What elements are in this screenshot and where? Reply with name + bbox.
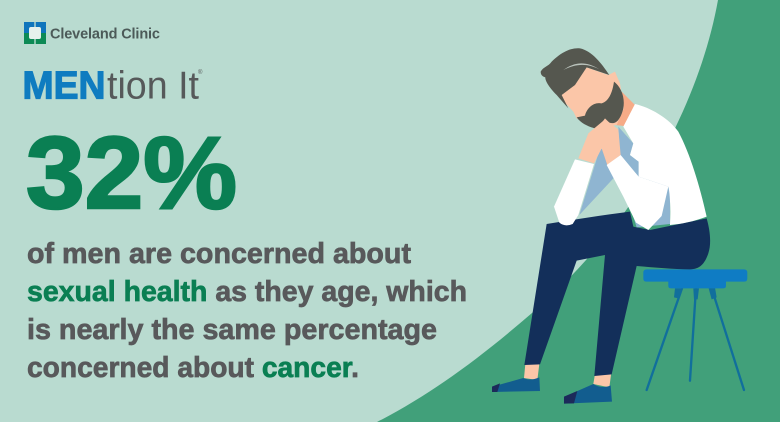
MENtion It program name: tion It: [107, 64, 199, 108]
stool: [643, 269, 747, 390]
face: [559, 67, 624, 128]
rear arm sleeve: [554, 159, 594, 225]
MENtion It program name: ®: [198, 69, 203, 76]
headline statistic: 32%: [26, 116, 237, 230]
beard: [577, 82, 624, 129]
body text: of men are concerned about: [27, 238, 411, 270]
MENtion It program name: [22, 64, 203, 108]
illustration: seated man: [492, 48, 747, 404]
front arm sleeve: [607, 155, 668, 230]
neck: [615, 92, 635, 126]
body text: [27, 238, 467, 384]
logo wordmark: Cleveland Clinic: [50, 26, 160, 42]
MENtion It program name: MEN: [22, 64, 106, 108]
white shirt body: [623, 104, 707, 225]
body text: concerned about cancer.: [27, 352, 359, 384]
icon: Cleveland Clinic cross: [24, 22, 46, 44]
body text: is nearly the same percentage: [27, 314, 437, 346]
green curved background panel: [377, 0, 780, 422]
trousers: [524, 212, 710, 376]
hair: [541, 48, 609, 108]
body text: sexual health as they age, which: [27, 276, 467, 308]
shirt underlay: [579, 127, 670, 227]
torso, arms and head: [541, 48, 707, 230]
legs and feet: [492, 212, 710, 404]
ankles: [524, 364, 611, 387]
shoes: [492, 377, 612, 404]
hands: [578, 119, 621, 165]
Cleveland Clinic logo: [24, 22, 160, 44]
